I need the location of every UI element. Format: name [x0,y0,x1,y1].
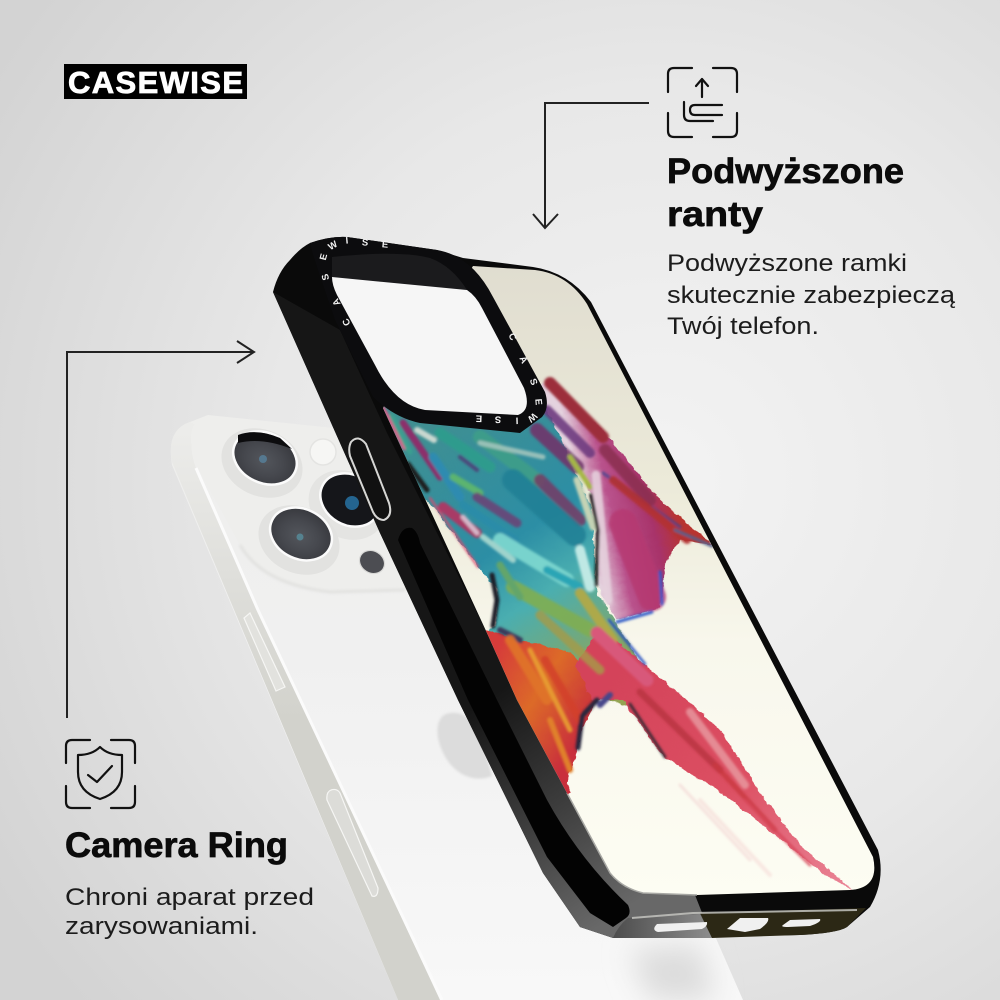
logo: CASEWISE [68,65,243,100]
ring lettering: C [340,316,353,328]
ring lettering: A [517,354,530,366]
text block: raised edges description: skutecznie zabezpieczą [667,282,956,309]
volume button [349,438,390,520]
art: orange lower [486,630,596,794]
ring lettering: E [532,398,544,406]
phone case [273,237,881,938]
case body [273,237,881,938]
arrow: top callout [533,103,649,228]
lip highlight [632,910,857,918]
apple logo [438,713,492,779]
ring hole [332,277,527,415]
icon: shield [66,740,135,808]
heading: Podwyższone ranty: ranty [667,195,764,234]
ring lettering: S [495,413,501,425]
port: mic [782,919,820,927]
art: pastel streaks [383,383,810,875]
side button upper [244,613,285,691]
art: purple wing [542,382,712,620]
ring lettering: S [320,273,332,281]
text block: raised edges description: Podwyższone ramki [667,250,907,277]
camera plateau [191,420,425,592]
ring lettering [318,235,544,426]
art: teal body [372,405,650,710]
camera ring [310,235,547,433]
plateau rim shading [240,545,405,592]
lens two [296,456,398,554]
text block: camera ring description [65,884,314,940]
phone side band [171,422,440,1000]
side band highlight [196,468,442,1000]
arrow: left callout [67,341,254,718]
ring lettering: I [345,235,349,247]
phone back body [171,415,743,1000]
ring lettering: E [318,253,330,261]
lidar sensor [355,546,389,578]
port: speaker [654,922,707,932]
printed panel [383,266,874,895]
text block: raised edges description [667,250,956,340]
text block: raised edges description: Twój telefon. [667,313,819,340]
text block: camera ring description: Chroni aparat przed [65,884,314,911]
panel background [383,266,874,895]
art: pink tail [575,630,853,890]
side button lower [327,789,378,896]
case side wall [273,292,712,938]
ring lettering: C [506,331,519,343]
text block: camera ring description: zarysowaniami. [65,913,258,940]
heading: Camera Ring: Camera Ring [65,826,288,865]
ring lettering: I [515,414,519,426]
side slot [398,528,630,927]
ring lettering: W [525,410,539,424]
ring lettering: W [326,239,340,253]
icon: raised edges [668,68,737,137]
ring lettering: E [476,412,482,424]
flash [310,439,336,465]
ring lettering: S [361,237,369,249]
lens three [247,492,351,588]
ring frame [310,237,547,433]
ring lettering: S [527,377,539,387]
shadow cast by case [630,945,715,1000]
bottom lip [613,914,712,938]
heading: Podwyższone ranty: Podwyższone [667,152,904,191]
port: usb [727,918,768,932]
bottom olive wall [700,908,866,938]
artwork: abstract pastel figure [372,383,853,890]
ring lettering: E [381,239,389,251]
heading: Podwyższone ranty [667,152,904,234]
ring inner wall [332,254,467,290]
panel rim highlight [567,793,697,895]
lens one [210,415,314,511]
ring lettering: A [330,296,343,308]
white phone [171,415,743,1000]
